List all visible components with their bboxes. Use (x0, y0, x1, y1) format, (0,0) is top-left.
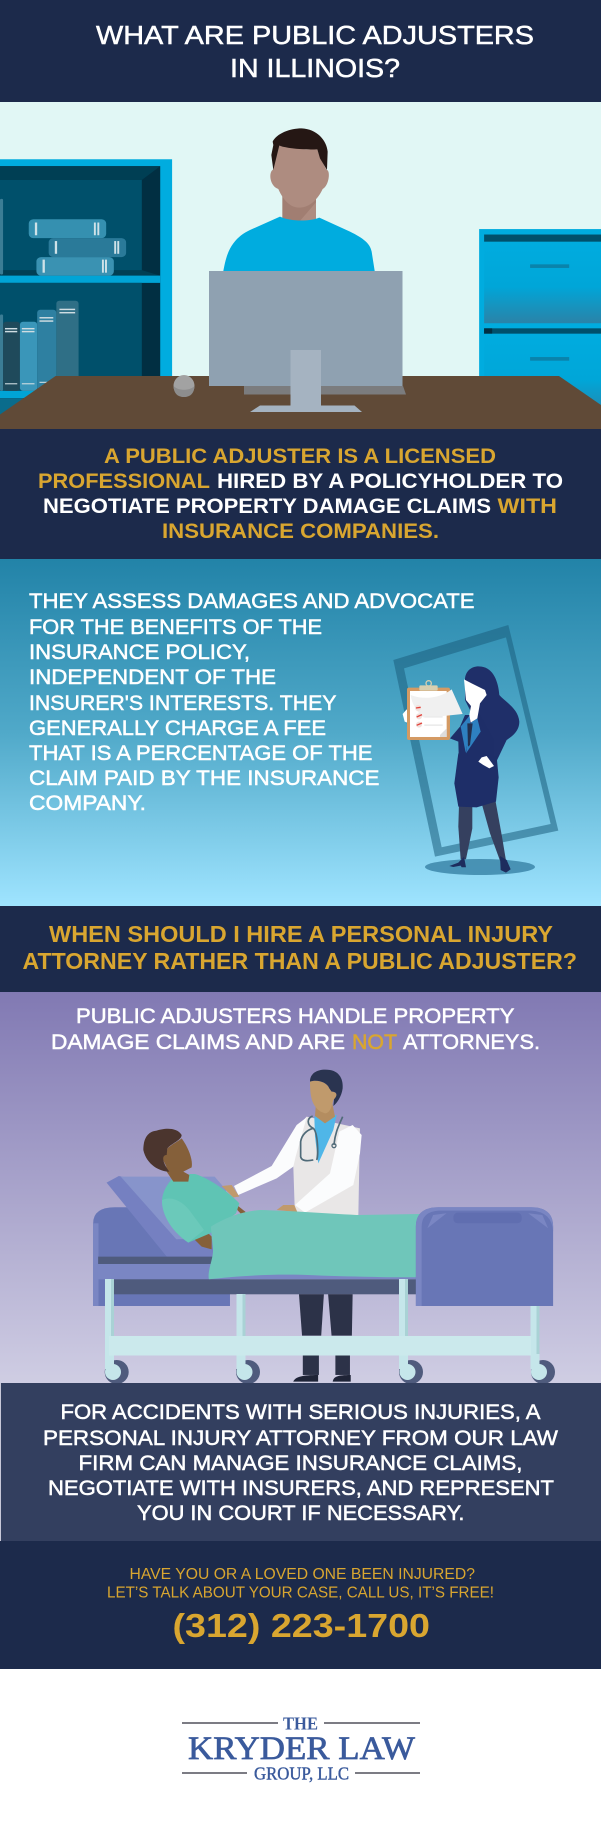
text: adjuster duties: THAT IS A PERCENTAGE OF THE (29, 742, 372, 765)
text: attorney services: YOU IN COURT IF NECESSARY. (137, 1502, 464, 1525)
heading: hire attorney question (22, 921, 577, 974)
icon: mouse (174, 375, 194, 397)
icon: filing cabinet (479, 229, 601, 418)
panel: when to hire attorney (0, 906, 601, 992)
text: attorney services: NEGOTIATE WITH INSURERS, AND REPRESENT (48, 1477, 554, 1500)
logo: The Kryder Law Group (182, 1714, 420, 1784)
panel: call to action (0, 1541, 601, 1669)
icon: doctor (222, 1070, 362, 1217)
logo: The Kryder Law Group: THE (283, 1714, 318, 1734)
text: attorney services: FOR ACCIDENTS WITH SERIOUS INJURIES, A (60, 1401, 540, 1424)
heading: hire attorney question: ATTORNEY RATHER THAN A PUBLIC ADJUSTER? (22, 948, 577, 974)
text: adjuster duties: INDEPENDENT OF THE (29, 666, 276, 689)
logo: The Kryder Law Group: KRYDER LAW (188, 1731, 416, 1767)
text: adjuster duties: GENERALLY CHARGE A FEE (29, 717, 326, 740)
icon: doctor legs (293, 1294, 353, 1382)
panel: doctor and patient (0, 992, 601, 1384)
text: not attorneys: PUBLIC ADJUSTERS HANDLE PROPERTY (76, 1005, 514, 1028)
title: WHAT ARE PUBLIC ADJUSTERS (96, 20, 534, 50)
text: adjuster duties: INSURER'S INTERESTS. THEY (29, 692, 336, 715)
icon: computer monitor (209, 271, 406, 412)
title: IN ILLINOIS? (230, 53, 400, 83)
panel: what adjusters do (0, 559, 601, 906)
text: attorney services: FIRM CAN MANAGE INSURANCE CLAIMS, (78, 1452, 522, 1475)
text: call to action: LET’S TALK ABOUT YOUR CASE, CALL US, IT’S FREE! (107, 1584, 494, 1602)
text: adjuster duties: THEY ASSESS DAMAGES AND ADVOCATE (29, 590, 475, 613)
panel: title header (0, 0, 601, 102)
icon: patient (143, 1129, 246, 1249)
title (96, 20, 534, 83)
text: not attorneys (51, 1005, 540, 1054)
icon: woman with clipboard (393, 625, 558, 875)
heading: hire attorney question: WHEN SHOULD I HIRE A PERSONAL INJURY (49, 921, 553, 947)
text: definition: WITH (498, 494, 557, 518)
panel: attorney explanation (0, 1383, 601, 1541)
phone number: (312) 223-1700 (172, 1608, 430, 1645)
logo: The Kryder Law Group: GROUP, LLC (254, 1764, 349, 1784)
icon: man at desk (223, 128, 375, 275)
icon: bed frame and wheels (105, 1279, 555, 1384)
icon: bookshelf with books (0, 159, 172, 416)
text: adjuster duties (29, 590, 475, 815)
text: attorney services: PERSONAL INJURY ATTORNEY FROM OUR LAW (43, 1427, 558, 1450)
text: not attorneys: ATTORNEYS. (403, 1031, 540, 1054)
text: definition (38, 444, 563, 543)
text: adjuster duties: FOR THE BENEFITS OF THE (29, 616, 322, 639)
text: call to action (107, 1566, 494, 1602)
panel: office illustration (0, 102, 601, 429)
panel: footer logo (0, 1669, 601, 1829)
text: attorney services (43, 1401, 558, 1525)
text: not attorneys: NOT (352, 1031, 397, 1054)
text: call to action: HAVE YOU OR A LOVED ONE BEEN INJURED? (130, 1566, 475, 1583)
icon: blanket (209, 1210, 420, 1279)
text: definition: NEGOTIATE PROPERTY DAMAGE CLAIMS (43, 494, 491, 518)
icon: bed head section (93, 1176, 422, 1306)
text: definition: HIRED BY A POLICYHOLDER TO (217, 469, 563, 493)
panel: definition callout (0, 429, 601, 559)
text: not attorneys: DAMAGE CLAIMS AND ARE (51, 1031, 345, 1054)
text: definition: INSURANCE COMPANIES. (162, 519, 439, 543)
text: adjuster duties: COMPANY. (29, 792, 146, 815)
text: definition: PROFESSIONAL (38, 469, 210, 493)
text: adjuster duties: CLAIM PAID BY THE INSURANCE (29, 767, 380, 790)
icon: bed foot board (416, 1207, 553, 1306)
text: adjuster duties: INSURANCE POLICY, (29, 641, 250, 664)
text: definition: A PUBLIC ADJUSTER IS A LICENSED (104, 444, 496, 468)
icon: hospital bed, doctor and patient (93, 1070, 555, 1384)
icon: desk (0, 376, 601, 429)
